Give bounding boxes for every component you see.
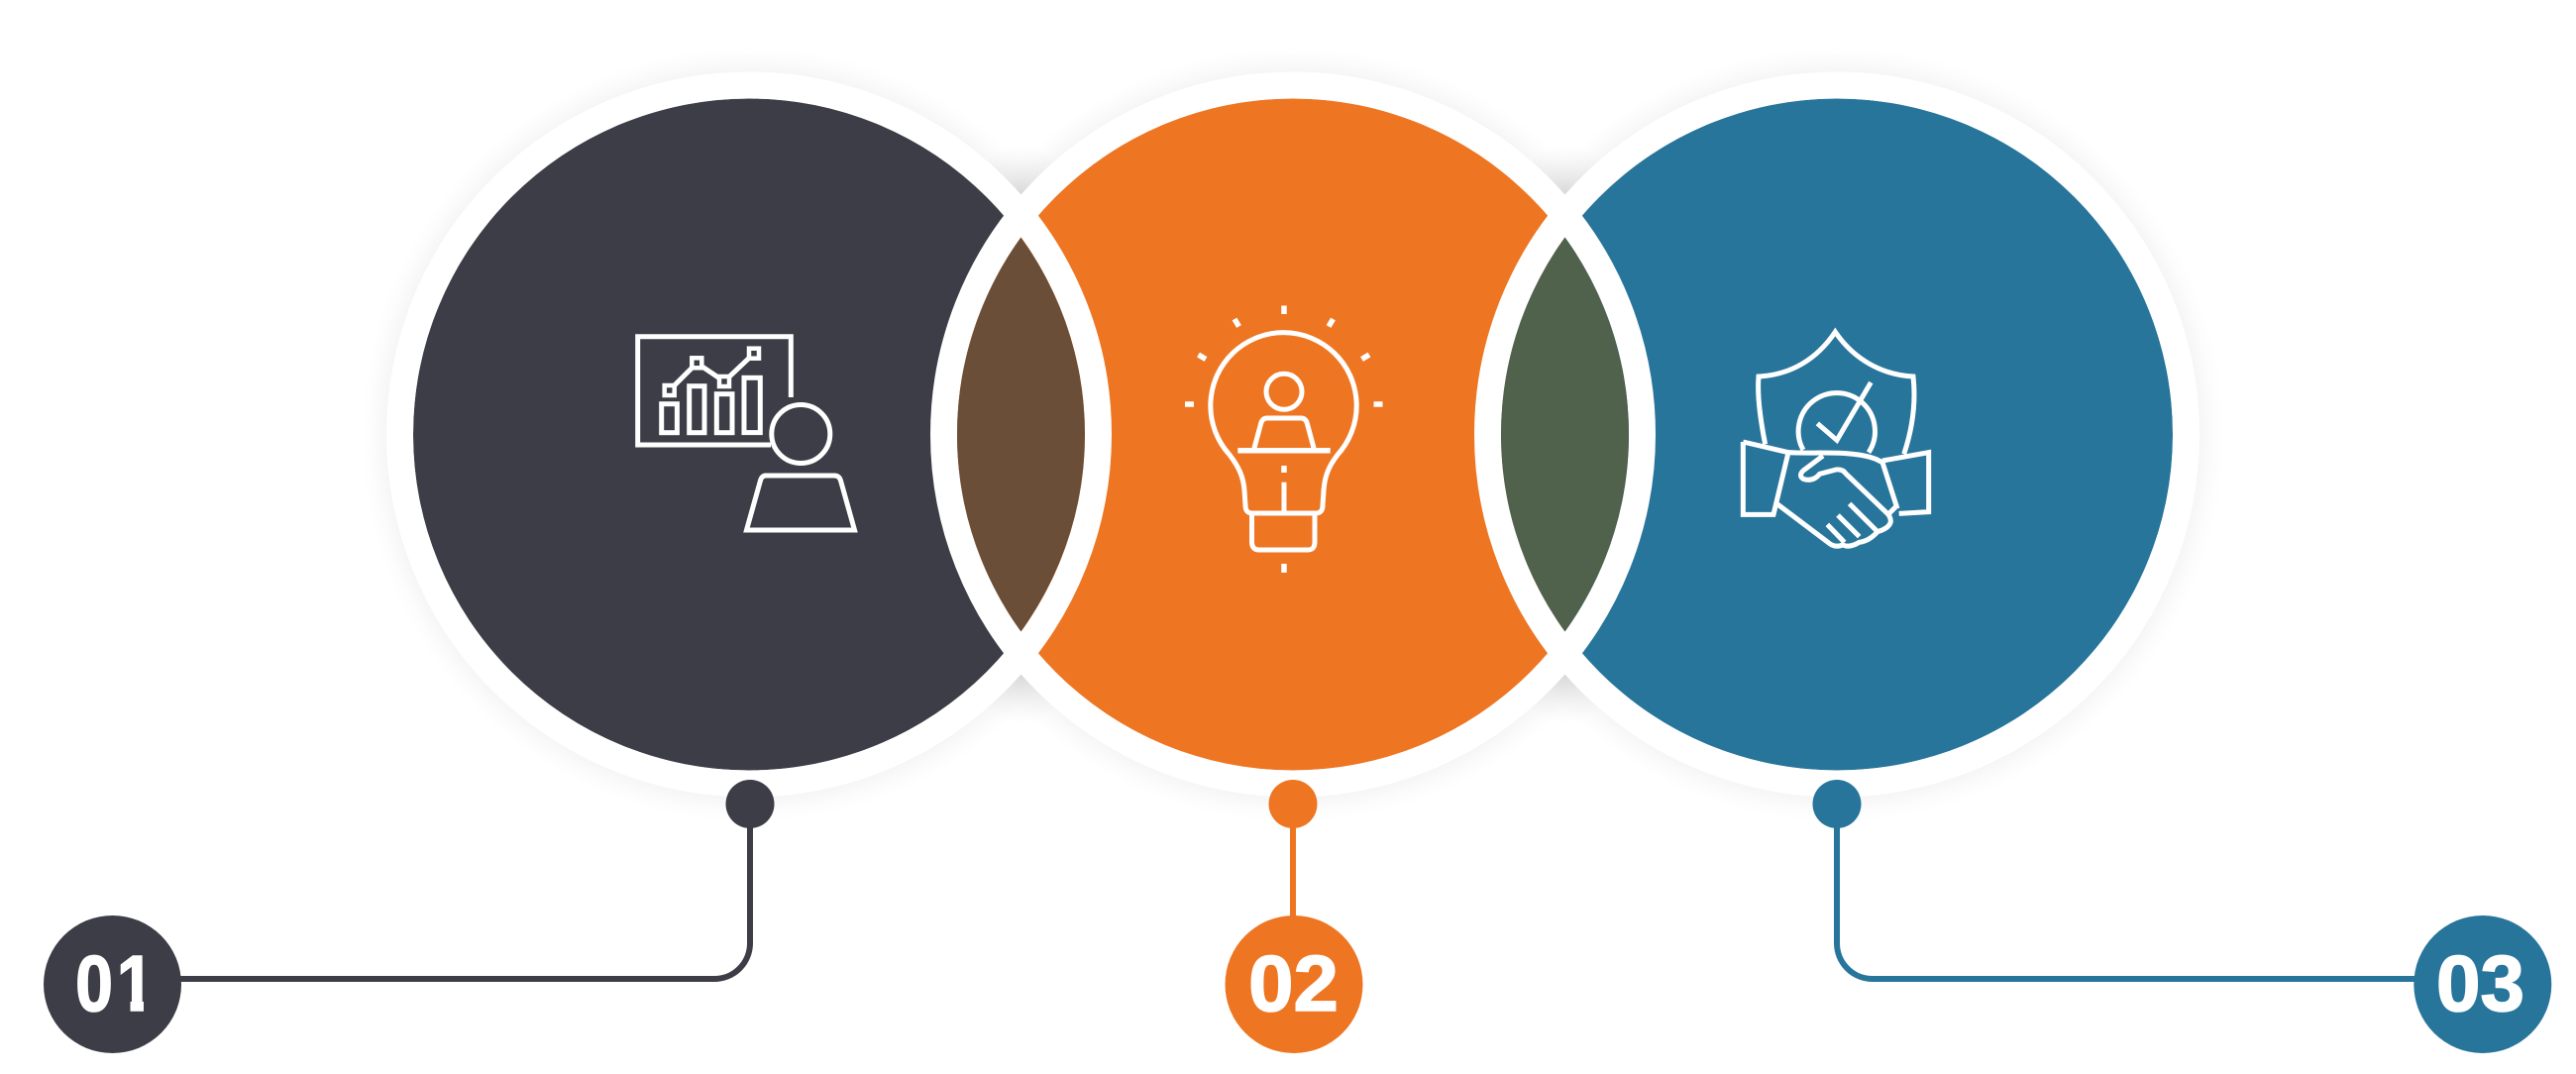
label 02: 02 <box>1248 940 1339 1028</box>
label 01 <box>77 955 144 1013</box>
connector 2: dot, line and number badge <box>1225 780 1363 1053</box>
soft shadows behind circles <box>380 65 2205 803</box>
icon: chart board and presenter <box>638 337 854 530</box>
overlap lens: brown <box>957 238 1085 632</box>
label 01: 1 <box>117 939 155 1027</box>
circle 1: dark <box>413 99 1085 771</box>
circle 3: teal <box>1501 99 2173 771</box>
label 01: 0 <box>75 939 113 1027</box>
icon: shield and handshake <box>1743 332 1929 546</box>
overlap lens: green <box>1501 238 1629 632</box>
connector 1: dot, line and number badge <box>44 780 775 1053</box>
panel: overlapping circles <box>400 85 2186 784</box>
label 03: 03 <box>2436 939 2524 1027</box>
icon: light bulb with person <box>1185 305 1383 573</box>
connector 3: dot, line and number badge <box>1813 780 2551 1053</box>
circle 2: orange <box>957 99 1629 771</box>
white rings <box>400 85 2186 784</box>
